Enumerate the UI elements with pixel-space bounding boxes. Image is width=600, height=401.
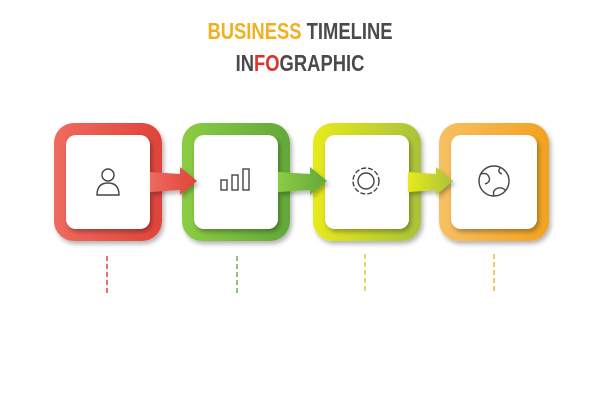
box 3 <box>313 123 421 241</box>
icon: person <box>97 169 119 195</box>
icon: bar chart <box>221 169 249 190</box>
arrow 2 <box>278 167 327 195</box>
box 4 <box>439 123 549 241</box>
arrow 1 <box>150 167 197 195</box>
box 2 <box>182 123 290 241</box>
arrow 3 <box>408 167 453 195</box>
icon: globe <box>479 166 509 196</box>
title: BUSINESS TIMELINE <box>207 18 393 44</box>
box 1 <box>54 123 162 241</box>
subtitle: INFOGRAPHIC <box>236 50 364 76</box>
icon: gear <box>353 168 379 194</box>
dashed lines <box>107 254 494 294</box>
